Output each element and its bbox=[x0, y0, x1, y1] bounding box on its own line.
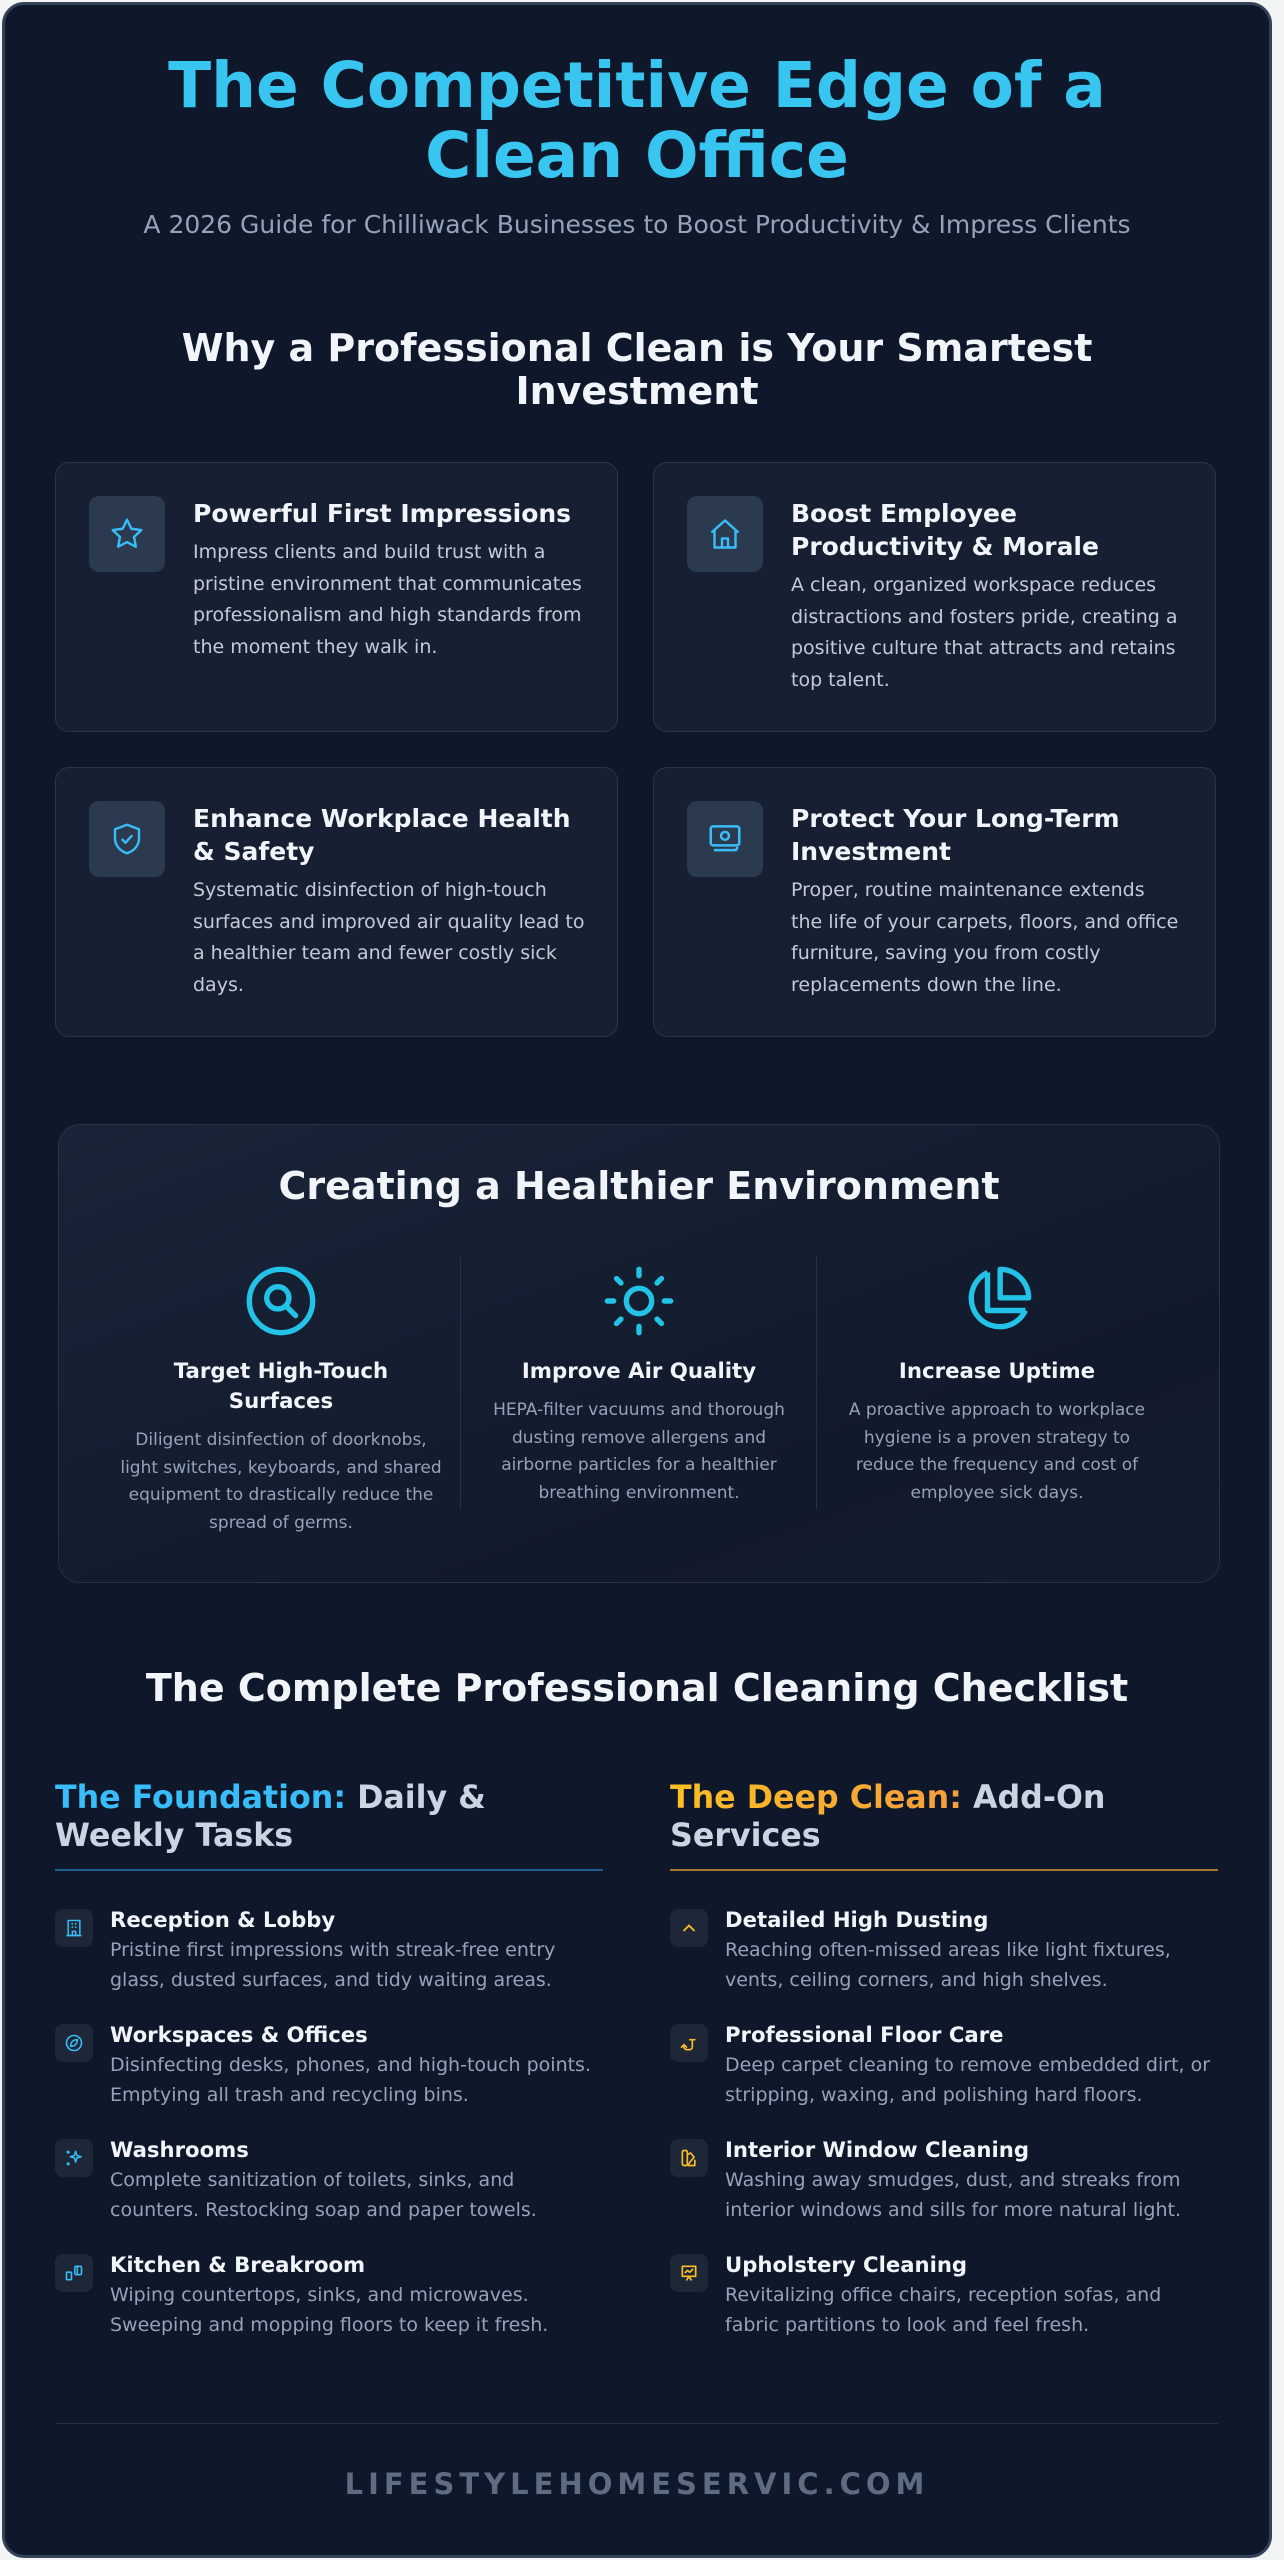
footer: LIFESTYLEHOMESERVIC.COM bbox=[345, 2467, 929, 2501]
text: health: Enhance Workplace Health bbox=[193, 804, 571, 833]
item: floor care: stripping, waxing, and polishing hard floors. bbox=[725, 2084, 1143, 2106]
item: kitchen: Kitchen & Breakroom bbox=[110, 2252, 365, 2277]
column: air quality: HEPA-filter vacuums and thorough dusting remove allergens and airborne particles for a healthier breathing environment. bbox=[493, 1400, 785, 1502]
column: uptime: Increase Uptime bbox=[899, 1359, 1095, 1384]
text: health: & Safety bbox=[193, 837, 314, 866]
item: workspaces: Emptying all trash and recycling bins. bbox=[110, 2084, 469, 2106]
item: high dusting: Detailed High Dusting bbox=[725, 1907, 988, 1932]
icon: sun bbox=[604, 1266, 674, 1336]
item: reception bbox=[55, 1907, 555, 1991]
title: The Competitive Edge of a bbox=[168, 49, 1106, 122]
icon: floor tool bbox=[670, 2024, 708, 2062]
column heading: deep clean: The Deep Clean: Add-On bbox=[670, 1780, 1106, 1816]
column: uptime: hygiene is a proven strategy to bbox=[864, 1428, 1130, 1448]
icon: leaf circle bbox=[55, 2024, 93, 2062]
item: reception: glass, dusted surfaces, and tidy waiting areas. bbox=[110, 1969, 552, 1991]
column: high touch: Surfaces bbox=[229, 1389, 333, 1414]
item: upholstery: fabric partitions to look and feel fresh. bbox=[725, 2314, 1089, 2336]
text: first impressions: Powerful First Impressions bbox=[193, 499, 571, 528]
column: uptime: reduce the frequency and cost of bbox=[856, 1455, 1138, 1475]
section heading: why: Why a Professional Clean is Your Smartest bbox=[182, 326, 1092, 370]
icon: sparkle bbox=[55, 2139, 93, 2177]
icon: swatch bbox=[670, 2139, 708, 2177]
icon: star bbox=[89, 496, 165, 572]
icon: money bbox=[687, 801, 763, 877]
item: reception: Reception & Lobby bbox=[110, 1907, 335, 1932]
text: investment: Proper, routine maintenance extends bbox=[791, 879, 1145, 901]
item: floor care: Professional Floor Care bbox=[725, 2022, 1004, 2047]
item: reception: Pristine first impressions with streak-free entry bbox=[110, 1939, 555, 1961]
icon: presentation bbox=[670, 2254, 708, 2292]
column heading: foundation: Weekly Tasks bbox=[55, 1818, 293, 1854]
column: high touch: Diligent disinfection of doorknobs, light switches, keyboards, and shared equipment to drastically reduce the spread of germs. bbox=[120, 1430, 442, 1532]
column: air quality bbox=[493, 1266, 785, 1502]
panel: investment bbox=[653, 767, 1216, 1037]
item: kitchen bbox=[55, 2252, 548, 2336]
section heading: checklist: The Complete Professional Cleaning Checklist bbox=[146, 1666, 1128, 1710]
item: upholstery: Upholstery Cleaning bbox=[725, 2252, 967, 2277]
item: workspaces bbox=[55, 2022, 591, 2106]
item: floor care: Deep carpet cleaning to remove embedded dirt, or bbox=[725, 2054, 1210, 2076]
item: workspaces: Disinfecting desks, phones, and high-touch points. bbox=[110, 2054, 591, 2076]
column heading: deep clean: Services bbox=[670, 1818, 821, 1854]
text: productivity: Boost Employee bbox=[791, 499, 1017, 528]
column heading: foundation: The Foundation: Daily & bbox=[55, 1780, 486, 1816]
panel: productivity bbox=[653, 462, 1216, 732]
item: windows: Interior Window Cleaning bbox=[725, 2137, 1029, 2162]
text: health bbox=[193, 804, 584, 996]
item: kitchen: Sweeping and mopping floors to keep it fresh. bbox=[110, 2314, 548, 2336]
item: windows: Washing away smudges, dust, and streaks from bbox=[725, 2169, 1180, 2191]
text: investment: the life of your carpets, floors, and office furniture, saving you from costly replacements down the line. bbox=[791, 910, 1178, 996]
text: productivity bbox=[791, 499, 1177, 690]
icon: appliances bbox=[55, 2254, 93, 2292]
icon: building bbox=[55, 1909, 93, 1947]
text: investment bbox=[791, 804, 1178, 996]
item: high dusting: vents, ceiling corners, and high shelves. bbox=[725, 1969, 1108, 1991]
title bbox=[168, 49, 1106, 192]
column: high touch bbox=[120, 1266, 442, 1532]
column: air quality: Improve Air Quality bbox=[522, 1359, 756, 1384]
text: first impressions: Impress clients and build trust with a pristine environment that communicates professionalism and high standards from the moment they walk in. bbox=[193, 541, 582, 658]
item: upholstery bbox=[670, 2252, 1161, 2336]
item: windows: interior windows and sills for more natural light. bbox=[725, 2199, 1181, 2221]
item: washrooms bbox=[55, 2137, 537, 2221]
panel: first impressions bbox=[55, 462, 618, 732]
section heading: why bbox=[182, 326, 1092, 413]
title: Clean Office bbox=[425, 119, 849, 192]
text: investment: Investment bbox=[791, 837, 951, 866]
column: high touch: Target High-Touch bbox=[174, 1359, 388, 1384]
item: kitchen: Wiping countertops, sinks, and microwaves. bbox=[110, 2284, 529, 2306]
text: productivity: Productivity & Morale bbox=[791, 532, 1099, 561]
column: uptime: employee sick days. bbox=[910, 1482, 1084, 1502]
column heading: foundation bbox=[55, 1780, 486, 1854]
column: uptime: A proactive approach to workplace bbox=[849, 1400, 1145, 1420]
panel: health safety bbox=[55, 767, 618, 1037]
item: workspaces: Workspaces & Offices bbox=[110, 2022, 368, 2047]
subtitle: A 2026 Guide for Chilliwack Businesses to Boost Productivity & Impress Clients bbox=[143, 210, 1131, 239]
section heading: why: Investment bbox=[515, 369, 759, 413]
icon: search circle bbox=[246, 1266, 316, 1336]
item: upholstery: Revitalizing office chairs, reception sofas, and bbox=[725, 2284, 1161, 2306]
panel: healthier environment bbox=[58, 1124, 1220, 1583]
text: health: Systematic disinfection of high-touch surfaces and improved air quality lead to a healthier team and fewer costly sick days. bbox=[193, 879, 584, 996]
text: productivity: A clean, organized workspace reduces distractions and fosters pride, creating a positive culture that attracts and retains top talent. bbox=[791, 574, 1177, 690]
text: investment: Protect Your Long-Term bbox=[791, 804, 1120, 833]
icon: shield bbox=[89, 801, 165, 877]
item: washrooms: Washrooms bbox=[110, 2137, 249, 2162]
column: uptime bbox=[849, 1266, 1145, 1502]
heading: healthier: Creating a Healthier Environment bbox=[278, 1164, 1000, 1208]
column heading: deep clean bbox=[670, 1780, 1106, 1854]
icon: house bbox=[687, 496, 763, 572]
item: windows bbox=[670, 2137, 1181, 2221]
item: high dusting: Reaching often-missed areas like light fixtures, bbox=[725, 1939, 1171, 1961]
item: washrooms: Complete sanitization of toilets, sinks, and bbox=[110, 2169, 514, 2191]
icon: pie chart bbox=[968, 1266, 1032, 1330]
item: washrooms: counters. Restocking soap and paper towels. bbox=[110, 2199, 537, 2221]
item: high dusting bbox=[670, 1907, 1171, 1991]
icon: chevron up bbox=[670, 1909, 708, 1947]
item: floor care bbox=[670, 2022, 1210, 2106]
